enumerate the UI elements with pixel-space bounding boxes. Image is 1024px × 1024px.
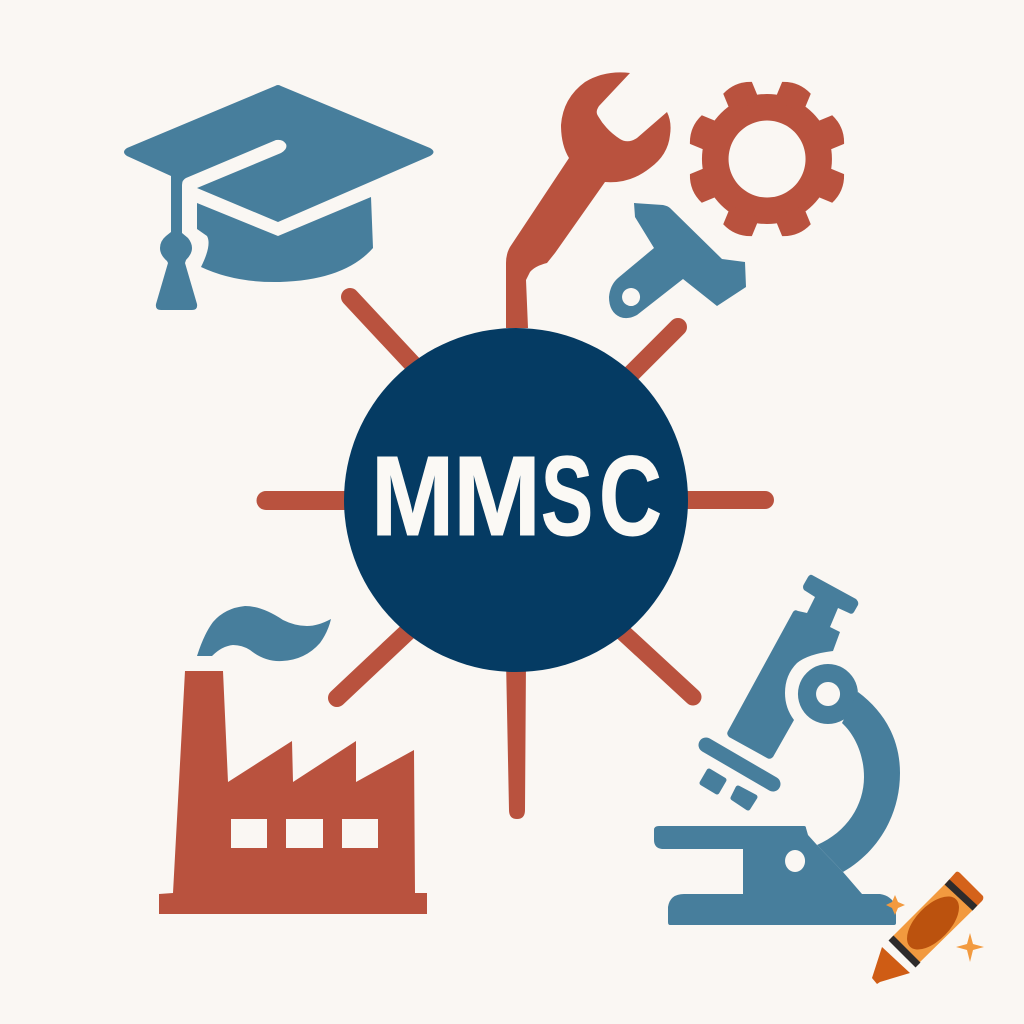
spokes: [266, 297, 765, 819]
title: MMSC: S: [541, 433, 593, 559]
title: MMSC: M: [453, 433, 541, 559]
icon: hammer tool: [609, 203, 746, 318]
icon: gear: [687, 79, 847, 239]
icon: factory: [159, 606, 427, 914]
title: MMSC: M: [370, 433, 454, 559]
title: MMSC: [370, 433, 661, 559]
smoke: [197, 606, 331, 661]
icon: microscope: [654, 575, 900, 925]
icon: crayon watermark: [872, 872, 984, 984]
icon: wrench: [506, 72, 671, 328]
sparkles: [886, 895, 905, 915]
icon: graduation cap: [124, 85, 434, 310]
central circle: [344, 328, 688, 672]
title: MMSC: C: [598, 433, 661, 559]
